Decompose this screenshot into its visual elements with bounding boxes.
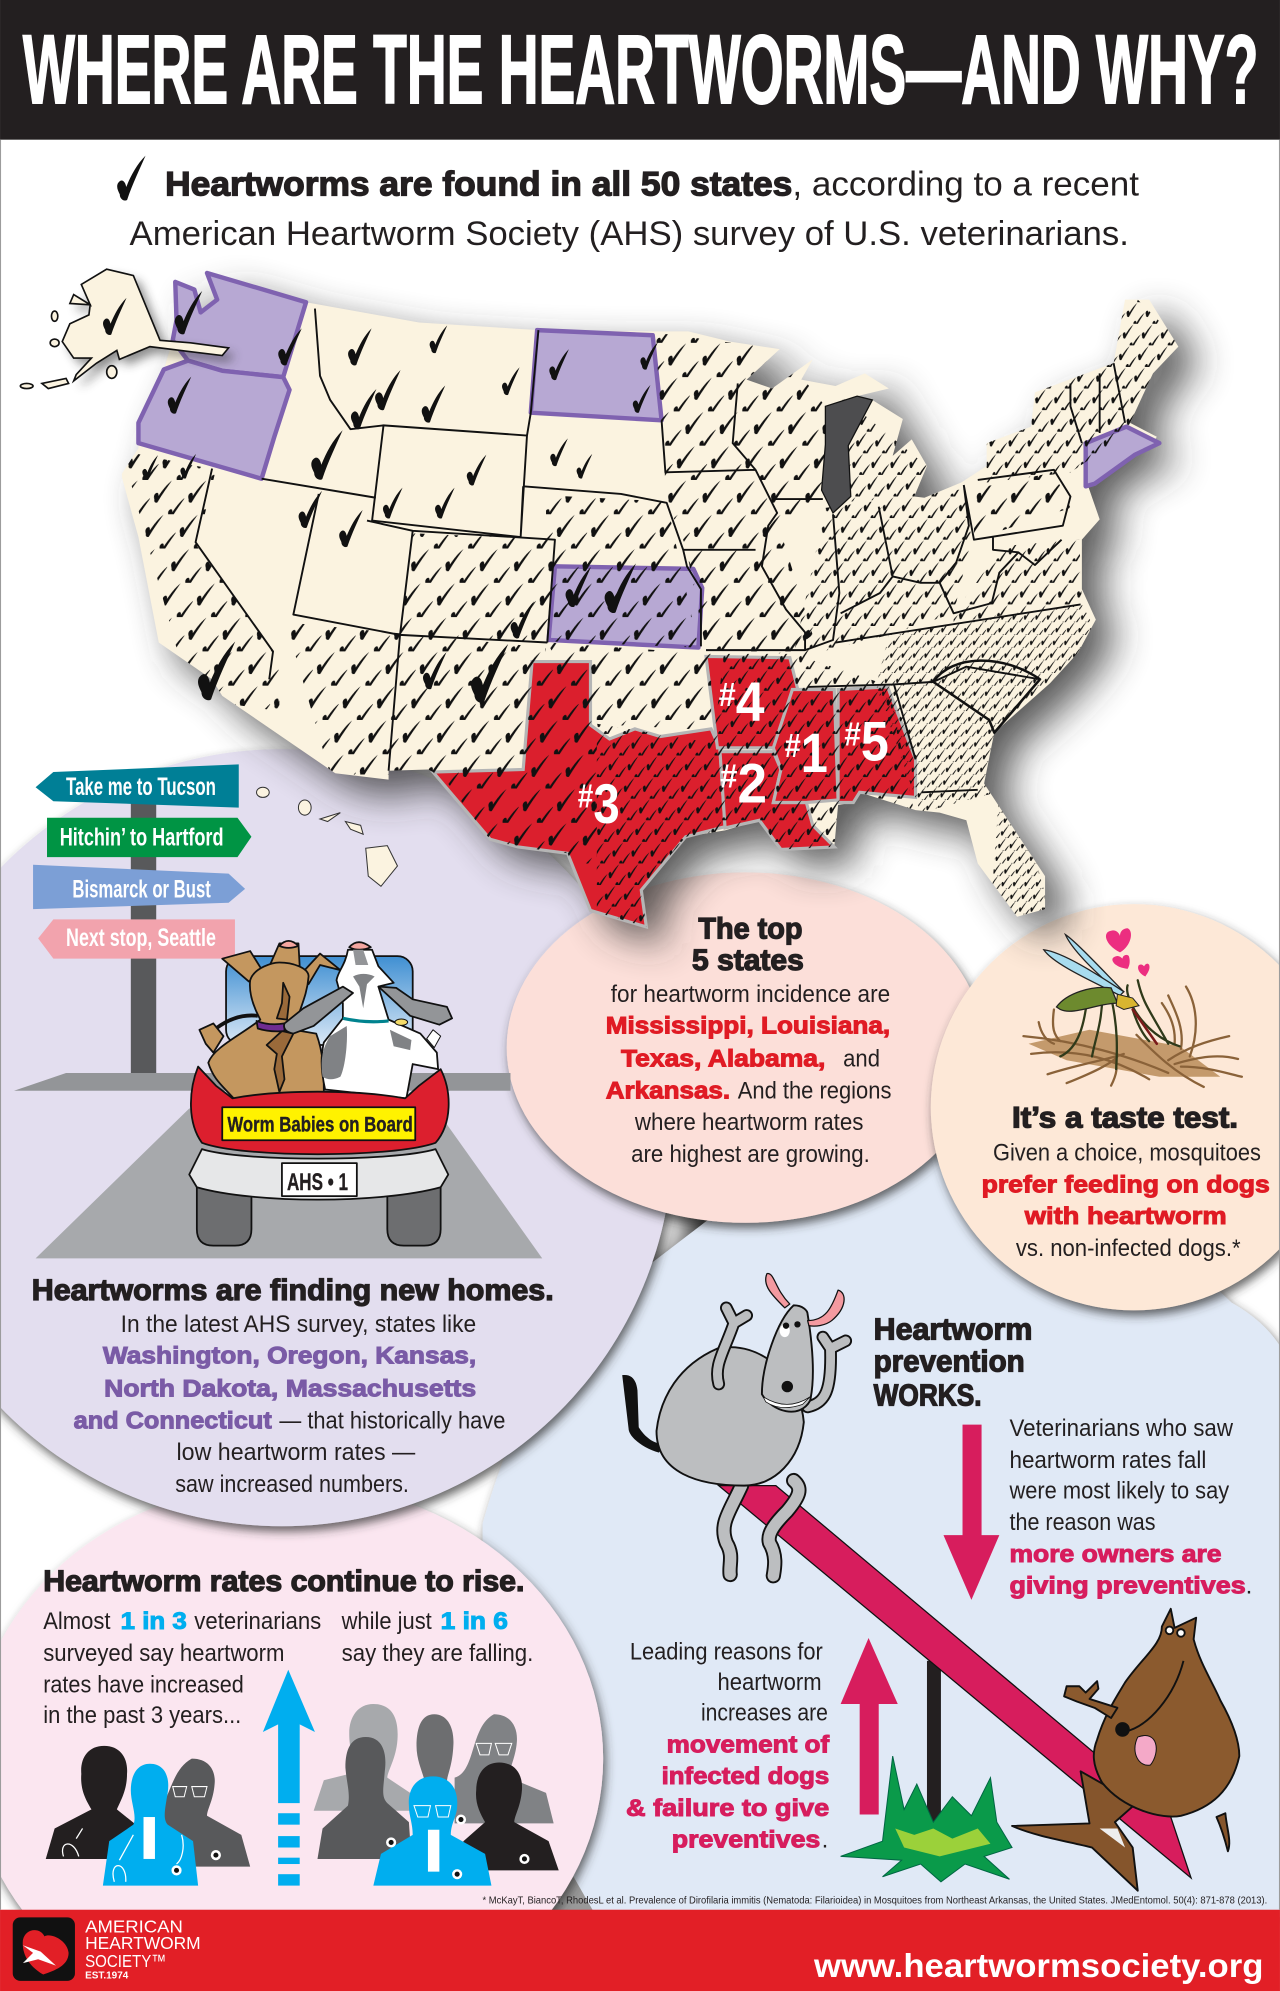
text: rates continue to rise: 1 in 3 [121,1608,187,1635]
tail [622,1375,663,1453]
hearts [1106,928,1131,952]
organisation name [85,1917,201,1981]
license plate: AHS • 1 [287,1169,348,1196]
icon: grass [841,1756,1012,1882]
text: rates continue to rise: veterinarians [194,1608,321,1635]
organisation name: SOCIETY™ [85,1951,166,1971]
state ranks: # [785,727,801,764]
organisation name: HEARTWORM [85,1933,201,1953]
sign: Bismarck [33,865,245,909]
text: top 5 states: are highest are growing. [631,1141,870,1168]
purple states [138,273,1159,648]
background panel: rates rise [0,1482,603,1991]
text: rates continue to rise: 1 in 6 [441,1608,508,1635]
state ranks: 5 [861,710,889,773]
text: new homes: low heartworm rates — [177,1439,416,1466]
sign: Seattle: Next stop, Seattle [66,924,216,952]
text: prevention works: prevention [874,1344,1025,1378]
tail [1216,1813,1229,1851]
people: 1 in 3 [46,1746,250,1886]
text: leading reasons: & failure to give [626,1795,829,1822]
text: top 5 states: 5 states [692,945,804,977]
organisation name: EST.1974 [85,1970,129,1981]
icon: mosquito biting dog fur with hearts [1023,928,1242,1087]
Lake Michigan [822,396,872,513]
text: top 5 states: for heartworm incidence are [611,981,890,1008]
text: rates continue to rise: surveyed say heartworm [43,1640,284,1667]
state ranks: # [844,715,861,752]
bumper sticker: Worm Babies on Board [227,1111,413,1136]
car with two dogs [189,941,452,1246]
text: leading reasons: preventives [672,1827,820,1854]
rear window [226,956,413,1045]
text: top 5 states: And the regions [738,1077,891,1104]
text: top 5 states [606,913,891,1168]
text: leading reasons: increases are [701,1700,828,1727]
text: top 5 states: The top [698,913,803,945]
text: leading reasons: Leading reasons for [630,1639,823,1666]
gap shadow wedges [540,1194,717,1917]
legs [724,1481,799,1576]
Alaska [20,269,235,389]
website: www.heartwormsociety.org [813,1947,1263,1984]
text: new homes [32,1275,554,1498]
text: prevention works: Veterinarians who saw [1010,1415,1234,1442]
seesaw [719,1486,1191,1878]
text: rates continue to rise: rates have increased [43,1672,244,1699]
text: leading reasons: . [822,1827,828,1854]
sign: Tucson: Take me to Tucson [66,773,216,801]
text: taste test [982,1103,1270,1262]
sign: Hartford [47,818,251,857]
fur [1023,987,1242,1087]
state borders [196,309,1125,792]
text: prevention works: the reason was [1010,1509,1156,1536]
text: rates continue to rise: say they are falling. [342,1640,533,1667]
brown dog going down [1012,1609,1239,1891]
state ranks: # [719,676,736,713]
large check marks [103,291,658,703]
Hawaii [257,787,397,886]
arms [717,1308,846,1407]
body [1056,987,1117,1011]
text: taste test: It’s a taste test. [1012,1103,1238,1135]
text: prevention works: WORKS. [874,1379,982,1413]
body [657,1347,804,1486]
arrow: blue up [263,1670,315,1886]
sign: Tucson [36,764,239,808]
background panel: new homes [0,749,673,1526]
text: new homes: In the latest AHS survey, states like [121,1311,476,1338]
text: taste test: vs. non-infected dogs.* [1016,1235,1241,1262]
people: 1 in 6 [314,1704,559,1886]
footer [0,1910,1280,1991]
text: leading reasons: heartworm [717,1669,822,1696]
white dog [284,942,452,1098]
state ranks [578,670,889,835]
text: prevention works [874,1313,1252,1600]
text: new homes: North Dakota, Massachusetts [104,1376,476,1403]
text: rates continue to rise: while just [341,1608,432,1635]
tires [197,1181,441,1246]
arrow: down [943,1425,999,1600]
background panel: taste test [931,904,1280,1310]
ears [766,1274,844,1326]
text: top 5 states: and [843,1046,880,1073]
wings [1065,935,1124,994]
logo [13,1917,75,1981]
sign: Hartford: Hitchin’ to Hartford [60,824,224,852]
organisation name: AMERICAN [85,1917,183,1937]
intro statement: American Heartworm Society (AHS) survey of U.S. veterinarians. [130,215,1129,253]
text: prevention works: heartworm rates fall [1010,1447,1206,1474]
bumper [189,1149,448,1200]
text: top 5 states: Texas, Alabama, [621,1046,825,1073]
text: new homes: — that historically have [279,1407,505,1434]
intro statement [117,156,1140,253]
background panel: prevention [483,1143,1280,1917]
arrow: up [841,1638,898,1815]
arm [1064,1681,1117,1718]
signpost [33,764,251,1084]
state ranks: # [578,778,593,815]
legs [1060,980,1180,1069]
state ranks: # [720,757,737,794]
bumper sticker [222,1107,415,1140]
background panel: top 5 states [507,872,984,1223]
check mark fill pattern [122,292,1181,940]
text: prevention works: . [1246,1573,1252,1600]
head [762,1305,813,1412]
text: leading reasons [626,1639,830,1854]
sign: Seattle [38,919,235,959]
text: taste test: with heartworm [1024,1203,1227,1230]
text: top 5 states: Mississippi, Louisiana, [606,1013,890,1040]
text: prevention works: were most likely to say [1009,1477,1229,1504]
text: new homes: Washington, Oregon, Kansas, [103,1343,476,1370]
text: prevention works: more owners are [1010,1541,1222,1568]
red top 5 states [433,656,916,927]
state ranks: 2 [737,751,767,814]
state ranks: 3 [593,772,620,835]
state ranks: 4 [736,670,764,733]
intro statement: , according to a recent [792,166,1140,204]
text: leading reasons: movement of [667,1731,830,1758]
text: prevention works: giving preventives [1010,1573,1246,1600]
text: rates continue to rise: Almost [43,1608,111,1635]
text: rates continue to rise: in the past 3 years... [43,1702,241,1729]
license plate [282,1163,357,1196]
brown dog [199,941,340,1098]
state ranks: 1 [801,721,828,784]
text: leading reasons: infected dogs [662,1763,829,1790]
hind leg [1012,1771,1138,1891]
car body [191,1067,449,1154]
text: top 5 states: Arkansas. [606,1077,730,1104]
text: new homes: and Connecticut [74,1407,272,1434]
text: new homes: Heartworms are finding new homes. [32,1275,554,1307]
map of the United States [20,269,1199,945]
grey dog going up [622,1274,846,1576]
text: top 5 states: where heartworm rates [634,1109,863,1136]
intro statement: Heartworms are found in all 50 states [165,166,792,204]
text: new homes: saw increased numbers. [175,1471,409,1498]
body [1094,1609,1239,1817]
sign: Bismarck: Bismarck or Bust [72,876,211,904]
road [14,1073,542,1258]
text: prevention works: Heartworm [874,1313,1032,1347]
text: rates continue to rise: Heartworm rates continue to rise. [43,1566,524,1598]
text: taste test: prefer feeding on dogs [982,1171,1270,1198]
text: rates continue to rise [43,1566,533,1729]
